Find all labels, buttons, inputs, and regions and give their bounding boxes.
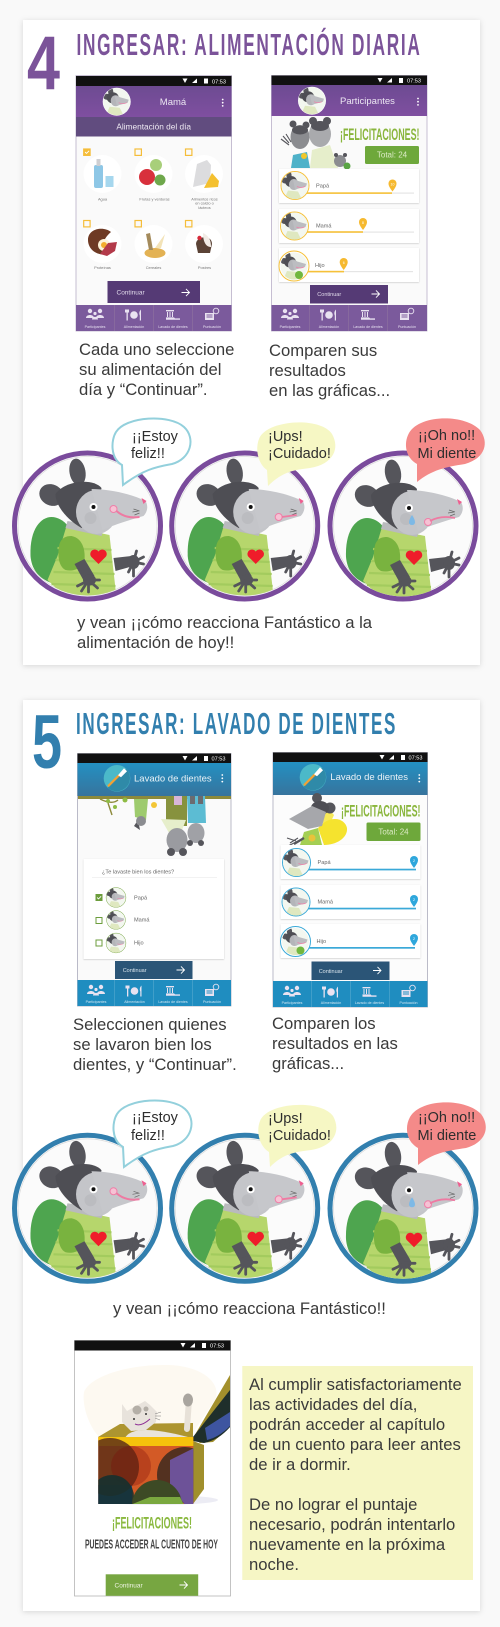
- phone screen: food results: Total: 24: [377, 151, 408, 160]
- illustration: hanging mice: [78, 796, 231, 856]
- reaction: sad mouse: [330, 1135, 476, 1281]
- bottom navigation: Alimentación: [124, 325, 144, 329]
- phone screen: food selection: 07:53: [212, 79, 226, 85]
- bottom navigation: Lavado de dientes: [353, 325, 383, 329]
- phone screen: food results: [272, 76, 427, 331]
- speech bubble: oh no: [407, 1102, 486, 1165]
- callout: story explanation: las actividades del día,: [249, 1395, 417, 1414]
- checkbox row: mother: Mamá: [134, 918, 150, 924]
- illustration: mouse family: [281, 117, 350, 170]
- result card: mother: [279, 209, 419, 243]
- food: fruit and vegetables: Frutas y verduras: [139, 196, 170, 202]
- bottom navigation: Lavado de dientes: [158, 325, 188, 329]
- result card: son: Hijo: [316, 939, 326, 945]
- speech bubble: oh no: ¡¡Oh no!!: [418, 428, 475, 444]
- callout: story explanation: De no lograr el puntaje: [249, 1495, 417, 1514]
- bottom navigation: Alimentación: [321, 1001, 341, 1005]
- reaction: happy mouse: [14, 1135, 160, 1281]
- speech bubble: oh no: ¡¡Oh no!!: [418, 1110, 475, 1126]
- phone screen: story unlocked: 07:53: [210, 1344, 224, 1350]
- bottom navigation: Participantes: [85, 325, 106, 329]
- avatar: [103, 88, 131, 116]
- reaction: sad mouse: [330, 453, 476, 599]
- food: cereals: Cereales: [146, 265, 161, 270]
- food: dairy: lácteos: [198, 205, 211, 210]
- callout: story explanation: noche.: [249, 1555, 299, 1574]
- caption: select who brushed: Seleccionen quienes: [73, 1015, 227, 1034]
- food: proteins: Proteínas: [94, 265, 111, 270]
- continue button: [312, 962, 390, 980]
- reaction: worried mouse: [172, 453, 318, 599]
- checkbox row: son: [96, 933, 144, 953]
- caption: choose food: día y “Continuar”.: [79, 380, 208, 399]
- food: cereals: [134, 225, 172, 270]
- caption: select who brushed: se lavaron bien los: [73, 1035, 212, 1054]
- congratulations title: ¡FELICITACIONES!: [341, 802, 420, 820]
- bottom navigation: Puntuación: [398, 325, 416, 329]
- brushing question card: [84, 859, 224, 959]
- caption: compare results: Comparen sus: [269, 341, 377, 360]
- result card: son: 6: [343, 261, 345, 265]
- caption: compare brushing: gráficas...: [272, 1054, 344, 1073]
- result card: mother: Mamá: [318, 900, 334, 906]
- continue button: [106, 1574, 198, 1596]
- phone screen: brushing results: Lavado de dientes: [330, 772, 408, 783]
- result card: father: 2: [413, 859, 415, 863]
- congratulations title: ¡FELICITACIONES!: [112, 1514, 192, 1532]
- result card: mother: 2: [413, 898, 415, 902]
- phone screen: food selection: Mamá: [160, 97, 187, 108]
- bottom navigation: Lavado de dientes: [355, 1001, 384, 1005]
- caption: reaction: y vean ¡¡cómo reacciona Fantástico a la: [77, 613, 373, 632]
- food: proteins: [84, 225, 122, 270]
- speech bubble: oh no: Mi diente: [418, 1128, 476, 1144]
- phone screen: brushing check: [78, 754, 231, 1006]
- speech bubble: happy: feliz!!: [131, 446, 165, 462]
- speech bubble: careful: ¡Ups!: [268, 429, 303, 445]
- brushing question card: ¿Te lavaste bien los dientes?: [102, 870, 174, 876]
- result card: mother: [280, 885, 420, 919]
- caption: compare brushing: Comparen los: [272, 1014, 376, 1033]
- reaction: worried mouse: [172, 1135, 318, 1281]
- callout: story explanation: de un cuento para leer antes: [249, 1435, 461, 1454]
- result card: son: Hijo: [315, 263, 325, 269]
- reaction: happy mouse: [14, 453, 160, 599]
- bottom navigation: Alimentación: [124, 1000, 145, 1004]
- checkbox row: father: [96, 887, 148, 908]
- total badge: [365, 146, 419, 164]
- phone screen: story unlocked: Continuar: [114, 1582, 144, 1589]
- speech bubble: happy: ¡¡Estoy: [132, 1110, 179, 1126]
- phone screen: story unlocked: [74, 1340, 230, 1596]
- result card: son: 2: [413, 937, 415, 941]
- speech bubble: oh no: [406, 418, 485, 482]
- unlock message: PUEDES ACCEDER AL CUENTO DE HOY: [85, 1538, 218, 1552]
- food: desserts: Postres: [198, 265, 211, 270]
- callout: story explanation: [242, 1366, 473, 1580]
- continue button: [115, 961, 192, 979]
- result card: mother: Mamá: [316, 224, 332, 230]
- caption: reaction: y vean ¡¡cómo reacciona Fantástico!!: [113, 1299, 386, 1318]
- food: dairy: Alimentos ricos: [191, 196, 218, 202]
- illustration: fairy mouse: [287, 793, 347, 846]
- continue button: [108, 281, 200, 303]
- callout: story explanation: de ir a dormir.: [249, 1455, 351, 1474]
- food: dairy: [185, 155, 223, 210]
- checkbox row: mother: [96, 910, 150, 930]
- callout: story explanation: Al cumplir satisfactoriamente: [249, 1375, 462, 1394]
- result card: son: [280, 924, 420, 958]
- phone screen: brushing results: Continuar: [319, 969, 343, 975]
- speech bubble: happy: [113, 1100, 191, 1167]
- result card: mother: 8: [362, 221, 364, 225]
- result card: father: Papá: [316, 184, 330, 190]
- cat: [122, 1394, 193, 1438]
- callout: story explanation: podrán acceder al capítulo: [249, 1415, 445, 1434]
- food: desserts: [185, 225, 223, 270]
- checkbox row: father: Papá: [134, 896, 148, 902]
- speech bubble: careful: ¡Cuidado!: [268, 446, 331, 462]
- food: dairy: en calcio o: [195, 201, 214, 206]
- phone screen: brushing check: Lavado de dientes: [134, 774, 212, 785]
- bottom navigation: [272, 305, 427, 331]
- speech bubble: careful: [258, 1105, 336, 1167]
- bottom navigation: Puntuación: [203, 325, 221, 329]
- caption: reaction: alimentación de hoy!!: [77, 633, 234, 652]
- bottom navigation: Puntuación: [400, 1001, 417, 1005]
- phone screen: food selection: [76, 76, 232, 331]
- speech bubble: careful: ¡Cuidado!: [268, 1128, 331, 1144]
- icon: toothbrush: [300, 764, 326, 791]
- result card: son: [279, 248, 419, 282]
- phone screen: brushing results: 07:53: [408, 756, 422, 762]
- speech bubble: careful: [257, 422, 335, 486]
- phone screen: food results: 07:53: [407, 79, 421, 85]
- checkbox row: son: Hijo: [134, 941, 144, 947]
- speech bubble: happy: ¡¡Estoy: [132, 429, 179, 445]
- caption: compare results: resultados: [269, 361, 346, 380]
- phone screen: brushing results: [273, 752, 428, 1007]
- panel: step 5 tooth brushing: [14, 700, 486, 1611]
- callout: story explanation: nuevamente en la próxima: [249, 1535, 446, 1554]
- caption: choose food: su alimentación del: [79, 360, 221, 379]
- bottom navigation: Puntuación: [203, 1000, 221, 1004]
- phone screen: food results: Continuar: [317, 292, 341, 298]
- bottom navigation: Participantes: [282, 1001, 303, 1005]
- phone screen: brushing check: 07:53: [212, 757, 226, 763]
- speech bubble: careful: ¡Ups!: [268, 1111, 303, 1127]
- caption: compare results: en las gráficas...: [269, 381, 390, 400]
- bottom navigation: Lavado de dientes: [158, 1000, 188, 1004]
- food: water: [84, 155, 122, 202]
- phone screen: food results: Participantes: [340, 96, 395, 107]
- bottom navigation: [76, 305, 232, 331]
- food: fruit and vegetables: [134, 155, 172, 202]
- illustration: cat in gift box: [84, 1365, 230, 1505]
- checkboxes: [84, 149, 192, 227]
- bottom navigation: Alimentación: [319, 325, 339, 329]
- result card: father: [280, 845, 420, 879]
- bottom navigation: Participantes: [280, 325, 301, 329]
- caption: select who brushed: dientes, y “Continuar”.: [73, 1055, 237, 1074]
- phone screen: brushing results: Total: 24: [378, 828, 409, 837]
- result card: father: [279, 169, 419, 203]
- phone screen: food selection: Continuar: [116, 290, 146, 296]
- panel: step 4 daily food: [14, 20, 485, 665]
- caption: compare brushing: resultados en las: [272, 1034, 398, 1053]
- continue button: [310, 285, 388, 304]
- food: water: Agua: [98, 196, 108, 202]
- caption: choose food: Cada uno seleccione: [79, 340, 234, 359]
- bottom navigation: Participantes: [86, 1000, 107, 1004]
- speech bubble: oh no: Mi diente: [418, 446, 476, 462]
- callout: story explanation: necesario, podrán intentarlo: [249, 1515, 455, 1534]
- result card: father: Papá: [318, 860, 331, 866]
- phone screen: brushing check: Continuar: [123, 968, 147, 974]
- congratulations title: ¡FELICITACIONES!: [340, 126, 420, 144]
- speech bubble: happy: feliz!!: [131, 1128, 165, 1144]
- phone screen: food selection: Alimentación del día: [116, 122, 191, 132]
- icon: toothbrush: [104, 765, 130, 792]
- bottom navigation: [78, 980, 231, 1006]
- speech bubble: happy: [112, 418, 190, 485]
- bottom navigation: [273, 981, 428, 1007]
- total badge: [366, 822, 420, 841]
- step number 4: 4: [27, 21, 60, 106]
- result card: father: 10: [391, 182, 394, 186]
- step number 5: 5: [32, 700, 62, 785]
